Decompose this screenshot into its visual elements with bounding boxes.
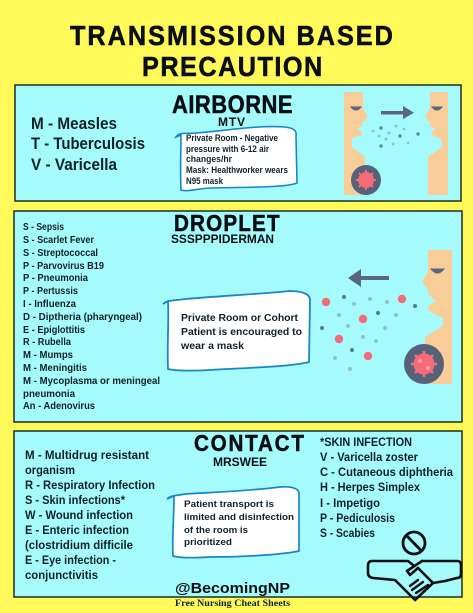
skin infection list: *SKIN INFECTION [320,435,412,449]
contact list: E - Enteric infection [25,523,129,537]
icon: droplet spread from face [320,250,452,384]
callout: contact precautions: Patient transport is [184,498,274,509]
callout: contact precautions: of the room is [184,524,248,535]
skin infection list [320,435,453,540]
contact list [25,448,155,582]
title: PRECAUTION [142,51,322,82]
airborne list [31,114,145,174]
heading: droplet: DROPLET [174,210,280,236]
callout: airborne precautions: N95 mask [186,176,223,186]
footer tagline: Free Nursing Cheat Sheets [175,598,291,608]
handle: @BecomingNP [175,580,290,597]
heading: contact [194,430,304,469]
icon: no contact handshake [368,532,461,600]
heading: airborne: MTV [218,115,245,129]
contact list: organism [25,463,75,477]
droplet list: M - Meningitis [23,363,87,374]
heading: airborne: AIRBORNE [172,91,293,118]
droplet list: S - Scarlet Fever [23,235,94,246]
callout: airborne precautions: pressure with 6-12 air [186,144,270,154]
contact list: S - Skin infections* [25,493,125,507]
skin infection list: C - Cutaneous diphtheria [320,465,453,479]
heading: droplet: SSSPPPIDERMAN [171,232,274,246]
droplet list: P - Parvovirus B19 [23,261,104,272]
contact list: (clostridium difficile [25,538,133,552]
droplet list: S - Streptococcal [23,248,98,259]
skin infection list: S - Scabies [320,526,375,540]
droplet list: S - Sepsis [23,222,64,233]
droplet list: pneumonia [23,389,75,400]
droplet list: D - Diptheria (pharyngeal) [23,312,142,323]
droplet list: An - Adenovirus [23,401,95,412]
droplet list: I - Influenza [23,299,76,310]
callout: airborne precautions: Private Room - Negative [186,133,278,143]
callout: airborne precautions: changes/hr [186,154,233,164]
droplet list: M - Mumps [23,350,73,361]
callout: airborne precautions: Mask: Healthworker wears [186,165,288,175]
droplet list: P - Pertussis [23,286,78,297]
airborne list: M - Measles [31,114,117,133]
callout: contact precautions: limited and disinfection [184,511,294,522]
panel: airborne [15,85,461,201]
heading: contact: CONTACT [194,430,304,456]
callout: airborne precautions [176,127,297,191]
skin infection list: P - Pediculosis [320,511,395,525]
callout: droplet precautions: Private Room or Cohort [181,313,299,324]
droplet list [23,222,160,412]
droplet list: P - Pneumonia [23,273,88,284]
droplet list: E - Epiglottitis [23,325,85,336]
panel: droplet [14,210,462,422]
contact list: R - Respiratory Infection [25,478,155,492]
callout: contact precautions: prioritized [184,536,232,547]
title: TRANSMISSION BASED [70,20,393,51]
contact list: W - Wound infection [25,508,133,522]
airborne list: T - Tuberculosis [31,134,145,153]
heading: contact: MRSWEE [213,455,267,469]
skin infection list: I - Impetigo [320,496,380,510]
icon: airborne transmission between faces [344,92,448,195]
callout: contact precautions [167,487,299,558]
contact list: conjunctivitis [25,568,98,582]
contact list: E - Eye infection - [25,553,116,567]
airborne list: V - Varicella [31,155,117,174]
skin infection list: H - Herpes Simplex [320,480,420,494]
skin infection list: V - Varicella zoster [320,450,418,464]
callout: droplet precautions: wear a mask [180,341,244,352]
callout: droplet precautions: Patient is encouraged to [181,327,302,338]
panel: contact [14,430,462,600]
title [70,20,393,82]
droplet list: M - Mycoplasma or meningeal [23,376,160,387]
droplet list: R - Rubella [23,337,71,348]
contact list: M - Multidrug resistant [25,448,149,462]
callout: droplet precautions [163,291,310,371]
